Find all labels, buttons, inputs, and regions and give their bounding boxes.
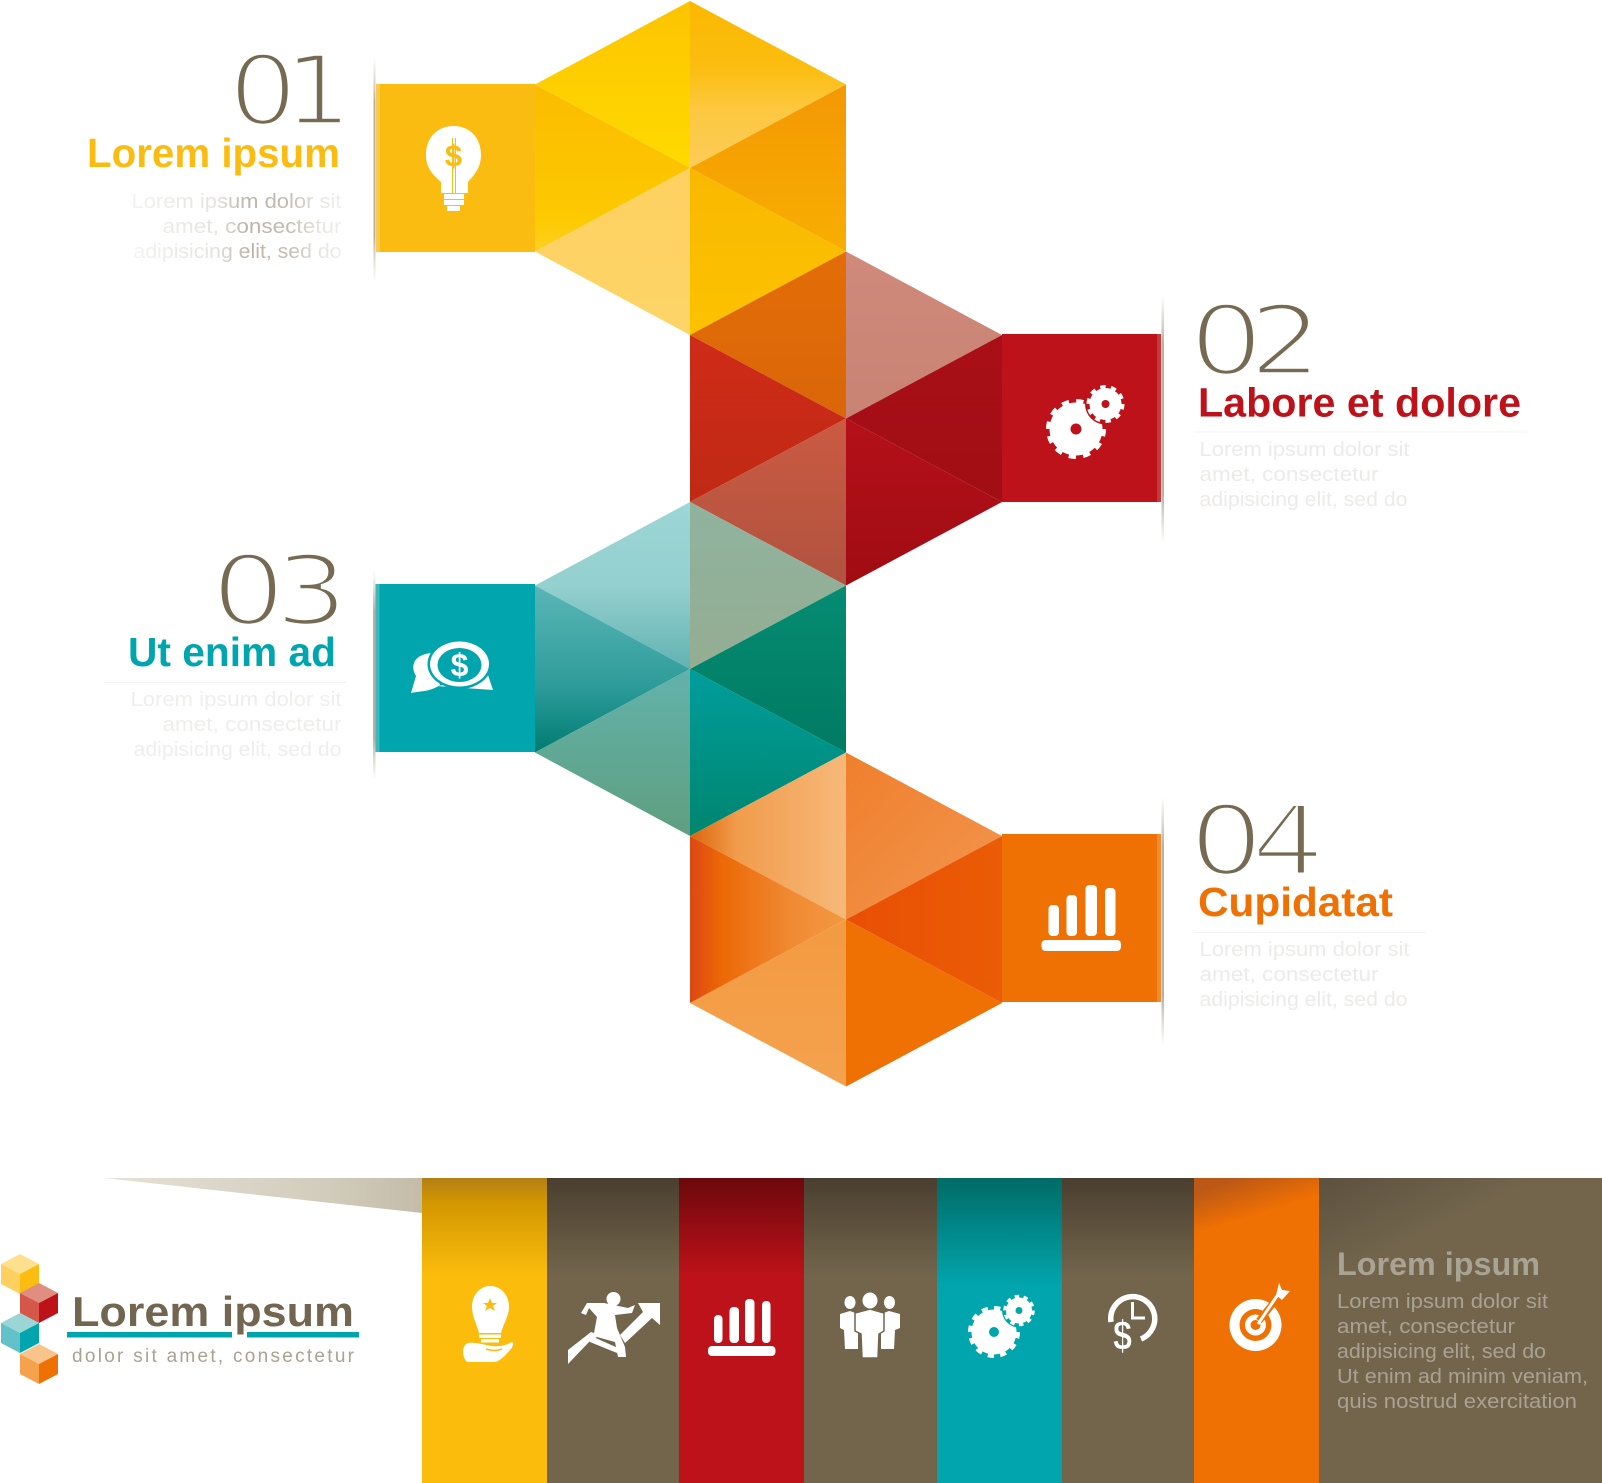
icon: clock with dollar xyxy=(1111,1297,1155,1359)
logo: cubes with wordmark xyxy=(1,1254,359,1384)
summary body: Lorem ipsum dolor sit xyxy=(1337,1290,1548,1313)
body text 01: amet, consectetur xyxy=(162,216,342,238)
body text 03: Lorem ipsum dolor sit xyxy=(130,689,342,711)
strip: red xyxy=(679,1178,804,1483)
strip: teal xyxy=(937,1178,1062,1483)
hexagon 3: teal xyxy=(535,502,846,836)
icon: target with dart xyxy=(1230,1283,1290,1351)
panel: summary text xyxy=(1319,1178,1602,1483)
icon: light bulb with dollar xyxy=(426,126,481,211)
strip: yellow xyxy=(422,1178,547,1483)
icon: stacked cubes xyxy=(1,1254,58,1384)
icon: bar chart xyxy=(1042,885,1121,951)
body text 03: amet, consectetur xyxy=(162,714,342,736)
logo title: Lorem ipsum xyxy=(72,1288,354,1335)
strip: brown xyxy=(547,1178,679,1483)
icon: gears xyxy=(1048,384,1126,457)
strip: orange xyxy=(1194,1178,1319,1483)
heading: Ut enim ad: Ut enim ad xyxy=(128,629,336,675)
icon: chat bubbles with dollar xyxy=(411,639,493,693)
hexagon 2: red xyxy=(690,252,1002,586)
summary body: quis nostrud exercitation xyxy=(1337,1390,1577,1413)
panel 01: yellow step xyxy=(87,35,535,282)
icon: running man with arrow xyxy=(568,1292,660,1364)
heading: Labore et dolore: Labore et dolore xyxy=(1198,380,1521,426)
strip: brown xyxy=(1062,1178,1194,1483)
body text 01: adipisicing elit, sed do xyxy=(134,241,342,263)
body text 04: amet, consectetur xyxy=(1200,964,1379,986)
number 03: 03 xyxy=(211,535,349,648)
icon: light bulb with dollar: $ xyxy=(445,138,462,173)
number 04: 04 xyxy=(1189,785,1325,898)
body text 02: adipisicing elit, sed do xyxy=(1200,489,1408,511)
icon: chat bubbles with dollar: $ xyxy=(451,647,469,683)
heading: Cupidatat: Cupidatat xyxy=(1198,879,1393,925)
summary body xyxy=(1337,1290,1588,1413)
strip: brown xyxy=(804,1178,937,1483)
body text 04: adipisicing elit, sed do xyxy=(1200,989,1408,1011)
icon: gears xyxy=(970,1294,1036,1356)
body text 03: adipisicing elit, sed do xyxy=(134,739,342,761)
summary body: Ut enim ad minim veniam, xyxy=(1337,1365,1588,1388)
body text 02: amet, consectetur xyxy=(1200,464,1379,486)
summary body: adipisicing elit, sed do xyxy=(1337,1340,1546,1363)
summary body: amet, consectetur xyxy=(1337,1315,1515,1338)
icon: bar chart xyxy=(708,1299,776,1356)
icon: clock with dollar: $ xyxy=(1113,1312,1132,1359)
icon: team of people xyxy=(840,1292,900,1358)
body text 04 xyxy=(1200,939,1410,1011)
body text 02 xyxy=(1200,439,1410,511)
summary heading: Lorem ipsum xyxy=(1337,1246,1540,1282)
heading: Lorem ipsum: Lorem ipsum xyxy=(87,130,340,176)
hexagon 4: orange xyxy=(690,752,1002,1086)
body text 01: Lorem ipsum dolor sit xyxy=(132,191,342,213)
bottom ribbon xyxy=(104,1178,1602,1483)
panel 04: orange step xyxy=(1002,785,1426,1045)
number 01: 01 xyxy=(228,35,352,148)
panel 03: teal step xyxy=(104,535,535,780)
body text 03 xyxy=(130,689,342,761)
body text 02: Lorem ipsum dolor sit xyxy=(1200,439,1410,461)
panel 02: red step xyxy=(1002,285,1527,544)
number 02: 02 xyxy=(1189,285,1323,398)
hexagon 1: yellow xyxy=(535,1,846,335)
body text 04: Lorem ipsum dolor sit xyxy=(1200,939,1410,961)
logo tagline: dolor sit amet, consectetur xyxy=(72,1346,355,1367)
body text 01 xyxy=(132,191,342,263)
icon: bulb in hand xyxy=(463,1286,513,1362)
